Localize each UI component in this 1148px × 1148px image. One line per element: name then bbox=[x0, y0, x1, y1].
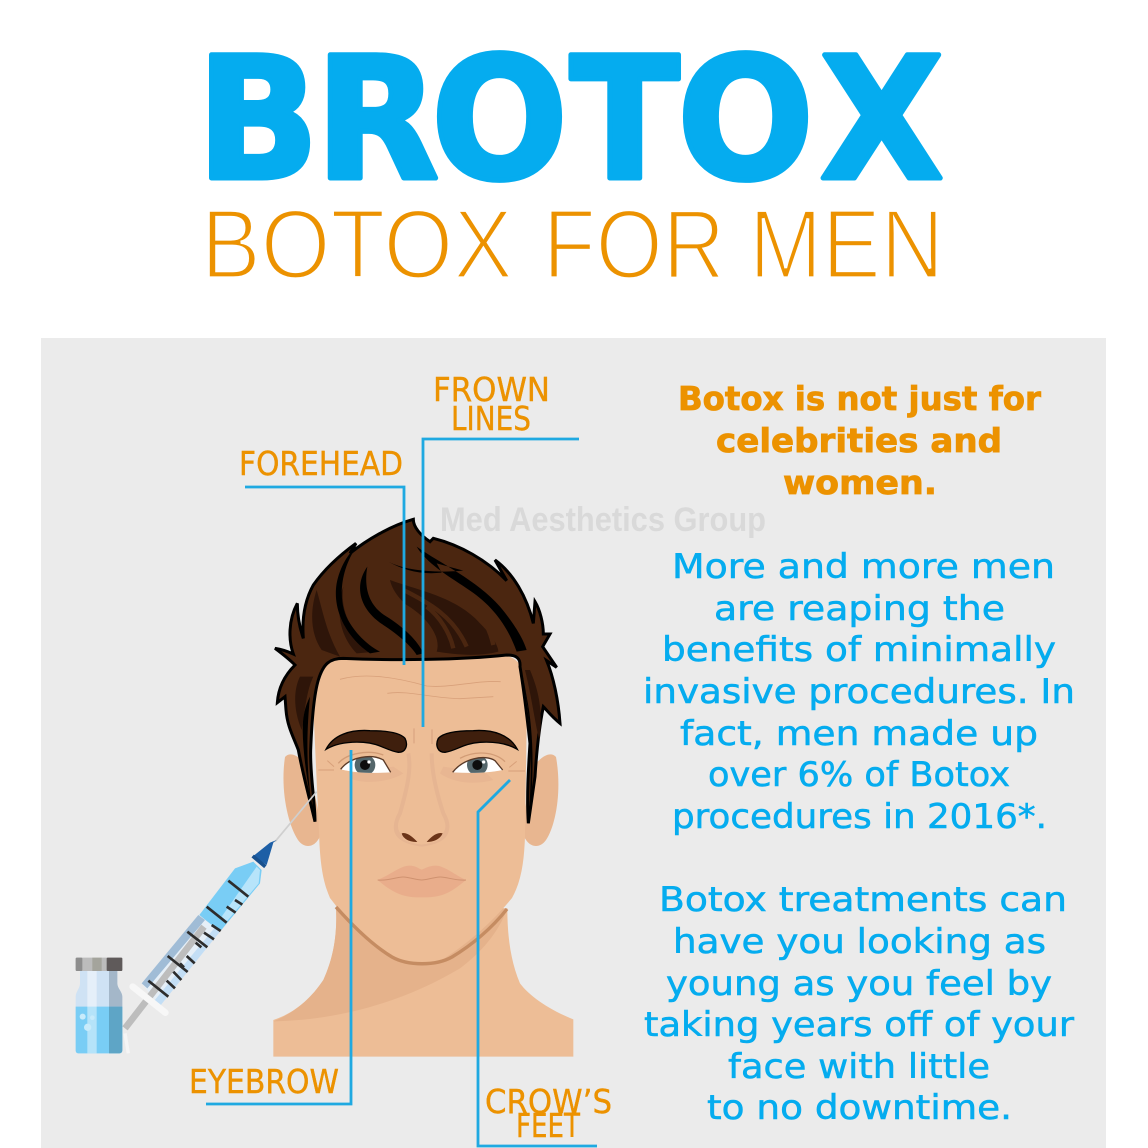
plunger bbox=[125, 927, 204, 1028]
text block: botox treatments: to no downtime. bbox=[707, 1088, 1012, 1128]
text block: botox treatments: have you looking as bbox=[673, 922, 1046, 962]
subtitle: BOTOX FOR MEN: BOTOX bbox=[201, 189, 513, 299]
text block: botox treatments: young as you feel by bbox=[666, 964, 1052, 1004]
label: crow's feet: CROW’S bbox=[485, 1082, 612, 1121]
callout line: forehead bbox=[245, 487, 404, 665]
needle bbox=[275, 792, 317, 842]
face bbox=[313, 653, 527, 963]
text block: more and more men: procedures in 2016*. bbox=[672, 797, 1047, 837]
text block: botox treatments: Botox treatments can bbox=[659, 880, 1067, 920]
frown creases bbox=[414, 728, 432, 744]
barrel liquid bbox=[199, 862, 262, 932]
heading: Botox is not just for celebrities and women: women. bbox=[783, 463, 937, 502]
vial cap bbox=[76, 958, 122, 971]
title: BROTOX: BROTOX bbox=[197, 21, 944, 218]
lips bbox=[378, 866, 466, 897]
needle hub bbox=[253, 840, 277, 865]
eyes, brows and nose bbox=[318, 730, 525, 773]
left eye bbox=[338, 752, 391, 775]
text block: botox treatments bbox=[644, 880, 1074, 1128]
heading: Botox is not just for celebrities and women: Botox is not just for bbox=[678, 379, 1042, 418]
subtitle: BOTOX FOR MEN: MEN bbox=[749, 189, 944, 299]
label: frown lines bbox=[433, 370, 550, 438]
text block: more and more men: are reaping the bbox=[714, 589, 1005, 629]
right eye bbox=[453, 753, 505, 775]
text block: botox treatments: face with little bbox=[728, 1047, 990, 1087]
jaw line bbox=[336, 907, 507, 964]
left eyebrow bbox=[326, 730, 406, 752]
dark hair strands bbox=[295, 580, 541, 740]
barrel empty section bbox=[142, 915, 220, 1006]
panel: grey background bbox=[41, 338, 1106, 1148]
callout line: eyebrow bbox=[206, 750, 351, 1104]
vial body bbox=[76, 971, 122, 1053]
text block: more and more men: More and more men bbox=[672, 547, 1055, 587]
forehead wrinkles bbox=[340, 676, 501, 686]
subtitle: BOTOX FOR MEN bbox=[201, 189, 944, 299]
text block: more and more men: benefits of minimally bbox=[662, 630, 1056, 670]
heading: Botox is not just for celebrities and women: celebrities and bbox=[716, 421, 1002, 460]
watermark: Med Aesthetics Group bbox=[440, 501, 766, 539]
label: frown lines: FROWN bbox=[433, 370, 550, 409]
label: crow's feet: FEET bbox=[516, 1106, 581, 1145]
under-eye shadows bbox=[350, 767, 493, 783]
subtitle: BOTOX FOR MEN: FOR bbox=[543, 189, 725, 299]
hair bbox=[275, 519, 560, 823]
callout line: frown lines bbox=[423, 439, 579, 727]
label: forehead: FOREHEAD bbox=[239, 444, 403, 483]
black hair strands bbox=[303, 547, 533, 823]
nose and mouth bbox=[378, 825, 466, 897]
illustration: man's head bbox=[273, 519, 573, 1057]
heading: Botox is not just for celebrities and women bbox=[678, 379, 1042, 502]
label: eyebrow: EYEBROW bbox=[189, 1062, 339, 1101]
syringe and vial bbox=[76, 792, 317, 1053]
text block: botox treatments: taking years off of your bbox=[644, 1005, 1074, 1045]
tick marks bbox=[148, 881, 248, 997]
flange bbox=[133, 987, 165, 1013]
nose shading bbox=[396, 753, 447, 838]
callout line: crow's feet bbox=[478, 780, 597, 1146]
label: crow's feet bbox=[485, 1082, 612, 1145]
text block: more and more men bbox=[643, 547, 1075, 837]
right eyebrow bbox=[437, 730, 517, 752]
text block: more and more men: over 6% of Botox bbox=[708, 755, 1010, 795]
text block: more and more men: invasive procedures. In bbox=[643, 672, 1075, 712]
ears bbox=[283, 754, 558, 846]
crow's feet wrinkles bbox=[318, 761, 525, 771]
neck and shoulders bbox=[273, 907, 573, 1057]
hair highlights bbox=[403, 590, 493, 648]
label: frown lines: LINES bbox=[451, 399, 531, 438]
text block: more and more men: fact, men made up bbox=[680, 714, 1038, 754]
